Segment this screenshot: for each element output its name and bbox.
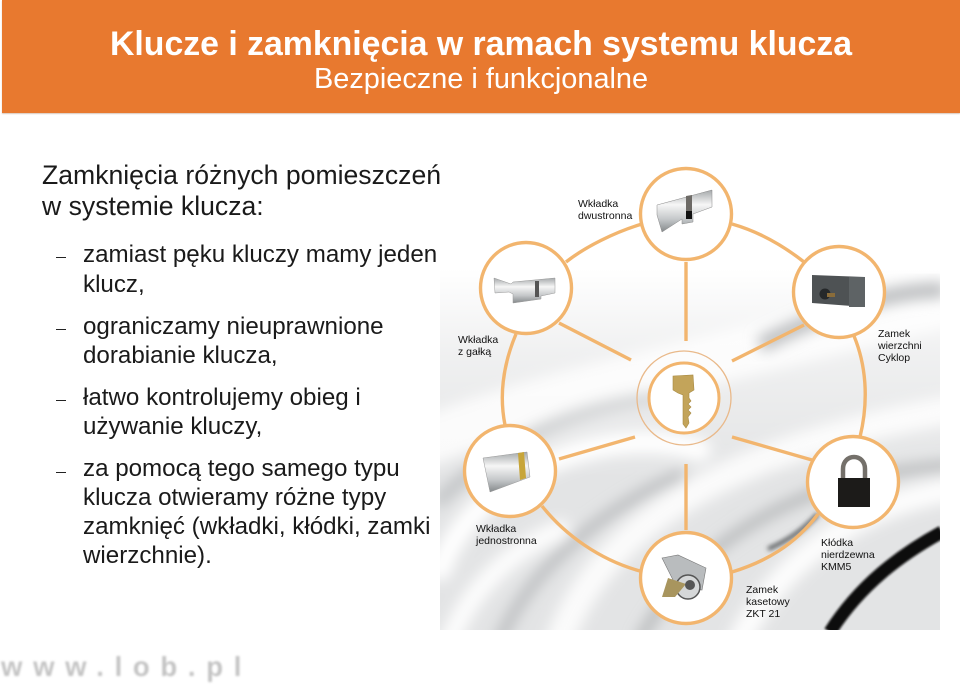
node: Wkładka dwustronna: dwustronna bbox=[578, 210, 632, 222]
bullet list: zamknięć (wkładki, kłódki, zamki bbox=[83, 513, 430, 540]
bullet list: łatwo kontrolujemy obieg i bbox=[83, 384, 361, 411]
icon: knob cylinder bbox=[494, 278, 555, 303]
bullet list: klucz, bbox=[83, 271, 145, 298]
icon: padlock bbox=[838, 457, 870, 507]
node: Zamek wierzchni Cyklop bbox=[794, 246, 922, 364]
node: Zamek kasetowy ZKT 21: kasetowy bbox=[746, 596, 791, 608]
bullet list bbox=[56, 241, 437, 569]
central key circle bbox=[637, 351, 731, 445]
bullet list: wierzchnie). bbox=[83, 542, 212, 569]
intro text: w systemie klucza: bbox=[42, 191, 264, 221]
node: Kłódka nierdzewna KMM5 bbox=[808, 436, 898, 573]
label: Zamek bbox=[746, 584, 779, 596]
bullet list: używanie kluczy, bbox=[83, 413, 262, 440]
subtitle: Bezpieczne i funkcjonalne bbox=[314, 63, 648, 95]
intro text: Zamknięcia różnych pomieszczeń bbox=[42, 160, 441, 190]
bullet list: ograniczamy nieuprawnione bbox=[83, 313, 384, 340]
label: Kłódka bbox=[821, 537, 853, 549]
node: Kłódka nierdzewna KMM5: KMM5 bbox=[821, 561, 851, 573]
bullet list: za pomocą tego samego typu bbox=[83, 455, 400, 482]
node: Wkładka z gałką bbox=[458, 242, 572, 358]
node: Wkładka jednostronna: jednostronna bbox=[475, 535, 537, 547]
label: Zamek bbox=[878, 328, 911, 340]
node: Zamek kasetowy ZKT 21 bbox=[640, 532, 791, 624]
title: Klucze i zamknięcia w ramach systemu klucza bbox=[110, 25, 852, 63]
icon: half cylinder bbox=[483, 452, 530, 492]
bullet list: klucza otwieramy różne typy bbox=[83, 484, 386, 511]
photo background bbox=[440, 274, 940, 630]
bullet list: zamiast pęku kluczy mamy jeden bbox=[83, 241, 437, 268]
node: Zamek wierzchni Cyklop: wierzchni bbox=[877, 340, 922, 352]
header banner bbox=[2, 0, 960, 113]
node: Zamek kasetowy ZKT 21: ZKT 21 bbox=[746, 608, 780, 620]
bullet list: dorabianie klucza, bbox=[83, 342, 278, 369]
diagram: key system bbox=[440, 166, 940, 630]
node: Wkładka z gałką: z gałką bbox=[458, 346, 491, 358]
node: Wkładka jednostronna bbox=[464, 426, 556, 547]
footer logo: www.lob.pl: www.lob.pl bbox=[1, 651, 252, 682]
icon: rim lock bbox=[812, 275, 865, 307]
label: Wkładka bbox=[476, 523, 516, 535]
intro text bbox=[42, 160, 441, 221]
icon: key bbox=[673, 375, 694, 428]
label: Wkładka bbox=[458, 334, 498, 346]
node: Zamek wierzchni Cyklop: Cyklop bbox=[878, 352, 910, 364]
icon: cam lock bbox=[662, 555, 706, 599]
node: Kłódka nierdzewna KMM5: nierdzewna bbox=[821, 549, 875, 561]
icon: double cylinder bbox=[657, 190, 712, 232]
connector lines bbox=[502, 224, 865, 572]
node: Wkładka dwustronna bbox=[578, 168, 732, 260]
label: Wkładka bbox=[578, 198, 618, 210]
